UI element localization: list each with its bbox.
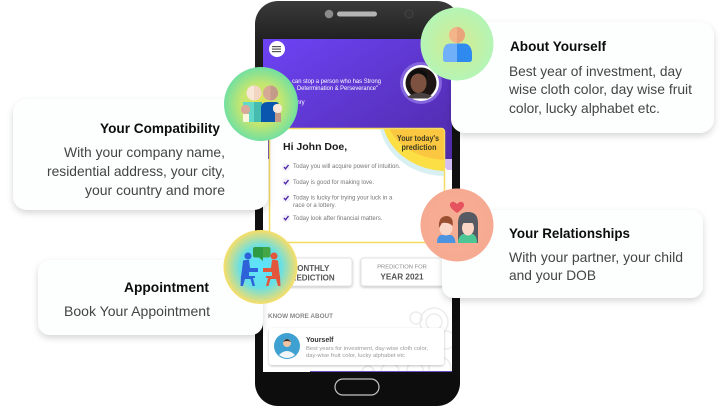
- phone camera and speaker: [325, 10, 413, 18]
- prediction label: prediction: [402, 142, 436, 152]
- prediction label: Your today's: [397, 133, 439, 143]
- greeting: Hi John Doe,: [283, 141, 347, 153]
- monthly prediction button: [268, 258, 352, 286]
- prediction label: [397, 133, 439, 152]
- monthly prediction button: MONTHLY: [291, 264, 330, 273]
- text: about description: [508, 63, 692, 116]
- menu button: [269, 41, 285, 57]
- quote: Determination & Perseverance": [297, 86, 378, 92]
- monthly prediction button: PREDICTION: [285, 274, 335, 282]
- prediction list: Today is good for making love.: [293, 180, 374, 186]
- panel: about yourself: [451, 22, 714, 133]
- prediction list: [282, 163, 401, 222]
- icon: compatibility: [224, 67, 298, 141]
- yourself card: Yourself: [306, 337, 334, 344]
- text: compatibility description: residential address, your city,: [47, 163, 225, 179]
- yourself avatar: [274, 333, 300, 359]
- right person: [263, 252, 280, 286]
- icon: about yourself: [420, 8, 494, 80]
- text: relationships description: With your partner, your child: [509, 249, 683, 265]
- prediction badge: [380, 129, 444, 176]
- text: compatibility description: [47, 144, 225, 198]
- phone mockup: [255, 1, 460, 406]
- text: compatibility description: your country and more: [85, 182, 225, 198]
- prediction list: Today is lucky for trying your luck in a: [293, 196, 393, 202]
- panel: your compatibility: [13, 99, 268, 210]
- prediction list: Today you will acquire power of intuition.: [293, 164, 401, 170]
- heading: your relationships: Your Relationships: [509, 225, 630, 241]
- purple header: [263, 39, 452, 159]
- prediction card: [268, 128, 446, 244]
- text: about description: Best year of investment, day: [509, 63, 682, 79]
- year prediction button: YEAR 2021: [380, 272, 424, 282]
- know more heading: KNOW MORE ABOUT: [268, 314, 333, 320]
- text: compatibility description: With your company name,: [64, 144, 225, 160]
- phone body: [255, 1, 460, 406]
- heading: appointment: Appointment: [124, 279, 209, 295]
- panel: appointment: [38, 260, 263, 335]
- woman: [458, 212, 478, 243]
- quote: can stop a person who has Strong: [292, 79, 381, 85]
- text: appointment description: Book Your Appointment: [64, 303, 210, 319]
- portrait: [400, 62, 442, 104]
- icon: your relationships: [420, 188, 494, 262]
- text: relationships description: [509, 249, 683, 283]
- prediction list: Today look after financial matters.: [293, 216, 383, 222]
- icon: appointment: [224, 230, 298, 304]
- watermark: [362, 307, 452, 371]
- quote: [292, 79, 381, 106]
- quote: dhry: [293, 100, 305, 106]
- left person: [240, 252, 258, 286]
- heading: about yourself: About Yourself: [510, 38, 606, 54]
- yourself card: Best years for investment, day-wise cloth color,: [306, 346, 428, 352]
- year prediction button: PREDICTION FOR: [377, 264, 427, 270]
- text: about description: wise cloth color, day wise fruit: [508, 81, 692, 97]
- yourself card: [269, 328, 444, 365]
- speech bubbles: [253, 247, 263, 261]
- prediction list: race or a lottery.: [293, 203, 336, 209]
- phone screen: [263, 39, 452, 372]
- yourself card: day-wise fruit color, lucky alphabet etc: [306, 353, 405, 359]
- text: relationships description: and your DOB: [509, 267, 596, 283]
- home button: [335, 379, 379, 395]
- panel: your relationships: [442, 210, 703, 298]
- heading: your compatibility: Your Compatibility: [100, 120, 220, 136]
- man: [437, 235, 456, 243]
- heart: [450, 202, 464, 213]
- text: about description: color, lucky alphabet etc.: [509, 100, 660, 116]
- year prediction button: [361, 258, 447, 286]
